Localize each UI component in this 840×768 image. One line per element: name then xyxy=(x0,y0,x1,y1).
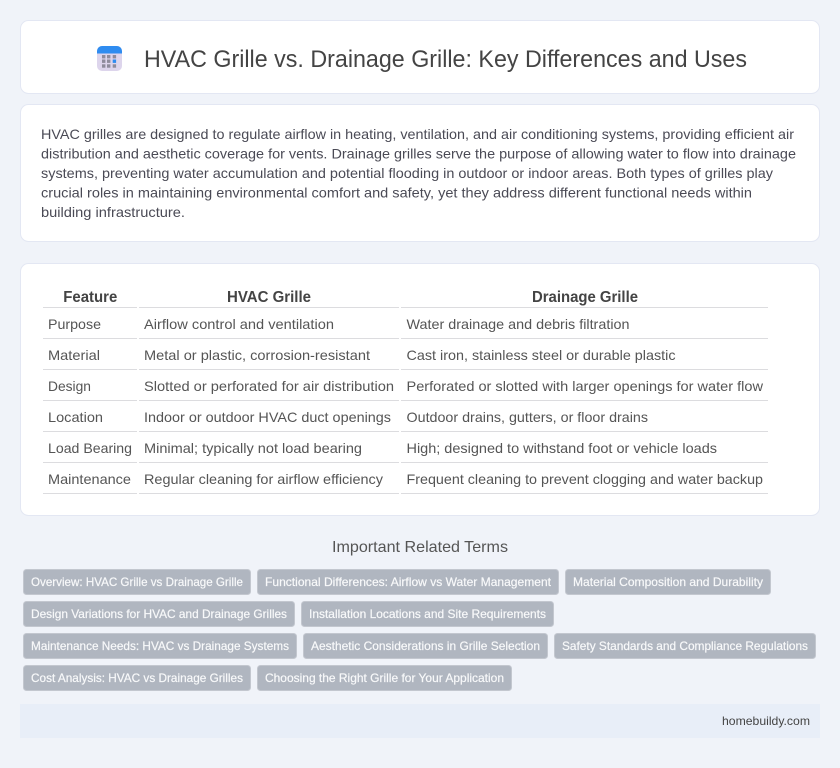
row: maintenance: Frequent cleaning to prevent clogging and water backup xyxy=(406,471,763,487)
table header row xyxy=(63,289,638,306)
row: location xyxy=(48,409,648,425)
row: purpose: Purpose xyxy=(48,316,101,332)
text block: description: distribution and aesthetic coverage for vents. Drainage grilles serve the purpose of allowing water to flow into drainage xyxy=(41,146,796,162)
row: purpose xyxy=(48,316,630,332)
row: purpose: Airflow control and ventilation xyxy=(144,316,334,332)
tag list: related terms: Functional Differences: Airflow vs Water Management xyxy=(265,575,552,589)
row: load bearing: Load Bearing xyxy=(48,440,132,456)
tag list: related terms: Installation Locations and Site Requirements xyxy=(309,607,546,621)
row: design xyxy=(48,378,764,394)
panel: intro paragraph xyxy=(20,104,820,242)
tag list: related terms: Design Variations for HVAC and Drainage Grilles xyxy=(31,607,287,621)
heading: related terms: Important Related Terms xyxy=(332,539,508,556)
row: material: Cast iron, stainless steel or durable plastic xyxy=(406,347,676,363)
row: design: Slotted or perforated for air distribution xyxy=(144,378,394,394)
row: location: Outdoor drains, gutters, or floor drains xyxy=(406,409,648,425)
row: material: Material xyxy=(48,347,100,363)
row: location: Indoor or outdoor HVAC duct openings xyxy=(144,409,391,425)
row: design: Perforated or slotted with larger openings for water flow xyxy=(406,378,764,394)
row: material: Metal or plastic, corrosion-resistant xyxy=(144,347,370,363)
row: load bearing: Minimal; typically not load bearing xyxy=(144,440,362,456)
row: maintenance xyxy=(48,471,763,487)
tag list: related terms xyxy=(24,570,816,690)
row: design: Design xyxy=(48,378,91,394)
row: location: Location xyxy=(48,409,103,425)
tag list: related terms: Maintenance Needs: HVAC vs Drainage Systems xyxy=(31,639,289,653)
table header row: Drainage Grille xyxy=(532,289,638,306)
text block: description: building infrastructure. xyxy=(41,204,185,220)
text block: description: systems, preventing water accumulation and potential flooding in outdoor or indoor areas. Both types of grilles play xyxy=(41,165,773,181)
footer xyxy=(20,704,820,738)
row: material xyxy=(48,347,676,363)
row: purpose: Water drainage and debris filtration xyxy=(406,316,630,332)
text block: description xyxy=(41,126,796,220)
tag list: related terms: Choosing the Right Grille for Your Application xyxy=(265,671,504,685)
tag list: related terms: Cost Analysis: HVAC vs Drainage Grilles xyxy=(31,671,243,685)
row: maintenance: Maintenance xyxy=(48,471,131,487)
footer source: homebuildy.com xyxy=(722,714,810,728)
tag list: related terms: Material Composition and Durability xyxy=(573,575,763,589)
row: maintenance: Regular cleaning for airflow efficiency xyxy=(144,471,383,487)
table header row: Feature xyxy=(63,289,118,306)
title: HVAC Grille vs. Drainage Grille: Key Differences and Uses xyxy=(144,46,747,73)
panel: header xyxy=(20,20,820,94)
tag list: related terms: Aesthetic Considerations in Grille Selection xyxy=(311,639,540,653)
text block: description: crucial roles in maintaining environmental comfort and safety, yet they address different functional needs within xyxy=(41,184,752,200)
tag list: related terms: Safety Standards and Compliance Regulations xyxy=(562,639,808,653)
icon: calendar xyxy=(97,46,122,71)
panel: comparison table xyxy=(20,264,820,516)
text block: description: HVAC grilles are designed to regulate airflow in heating, ventilation, and air conditioning systems, providing efficient air xyxy=(41,126,794,142)
table header row: HVAC Grille xyxy=(227,289,311,306)
row: load bearing xyxy=(48,440,717,456)
row: load bearing: High; designed to withstand foot or vehicle loads xyxy=(406,440,717,456)
tag list: related terms: Overview: HVAC Grille vs Drainage Grille xyxy=(31,575,243,589)
